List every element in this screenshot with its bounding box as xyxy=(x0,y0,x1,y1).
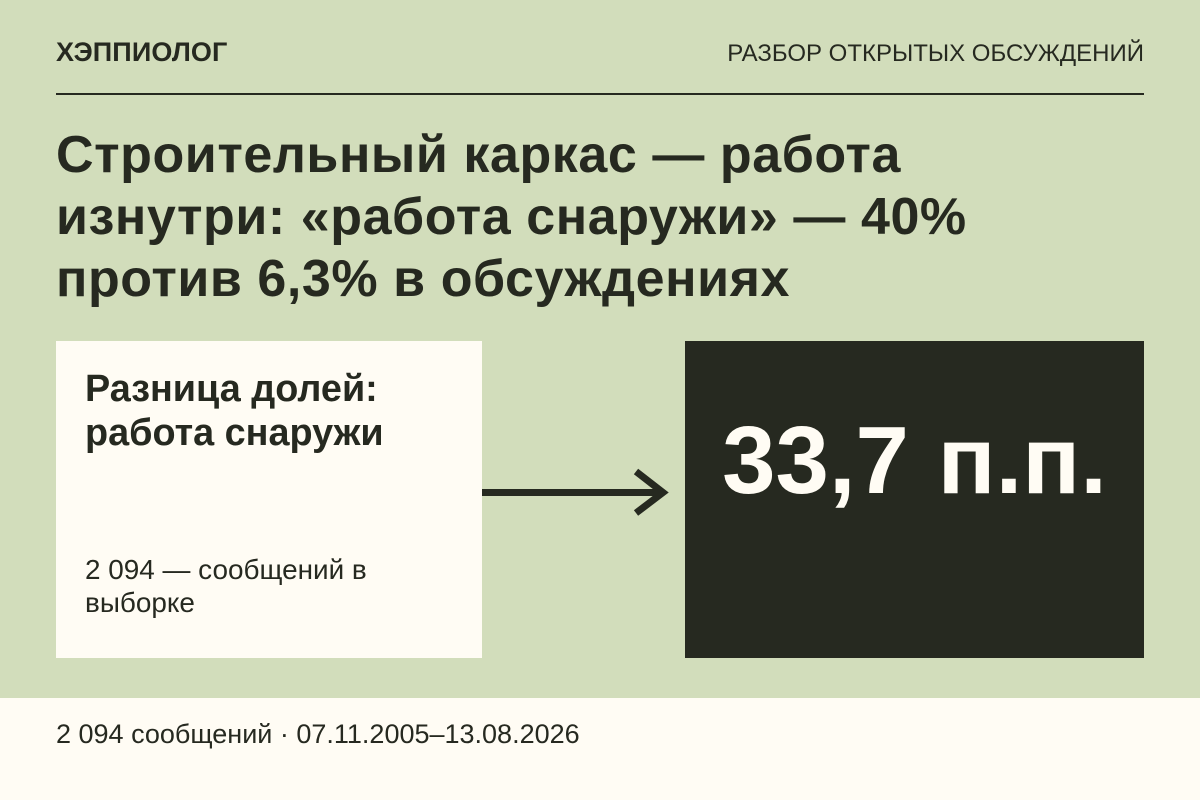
title: против 6,3% в обсуждениях xyxy=(56,250,790,308)
panel: source xyxy=(56,341,482,658)
sample note: выборке xyxy=(85,587,195,618)
panel heading: Разница долей: xyxy=(85,368,378,410)
footer xyxy=(0,698,1200,800)
title: изнутри: «работа снаружи» — 40% xyxy=(56,188,967,246)
arrow xyxy=(482,468,669,516)
brand heading: ХЭППИОЛОГ xyxy=(56,37,227,67)
panel heading xyxy=(85,368,384,454)
result value: 33,7 п.п. xyxy=(722,407,1107,514)
sample note xyxy=(85,554,367,618)
sample note: 2 094 — сообщений в xyxy=(85,554,367,585)
footer text: 2 094 сообщений · 07.11.2005–13.08.2026 xyxy=(56,719,580,749)
panel heading: работа снаружи xyxy=(85,412,384,454)
title: Строительный каркас — работа xyxy=(56,126,901,184)
panel: result xyxy=(685,341,1144,658)
title xyxy=(56,126,967,308)
section label: РАЗБОР ОТКРЫТЫХ ОБСУЖДЕНИЙ xyxy=(727,40,1144,67)
